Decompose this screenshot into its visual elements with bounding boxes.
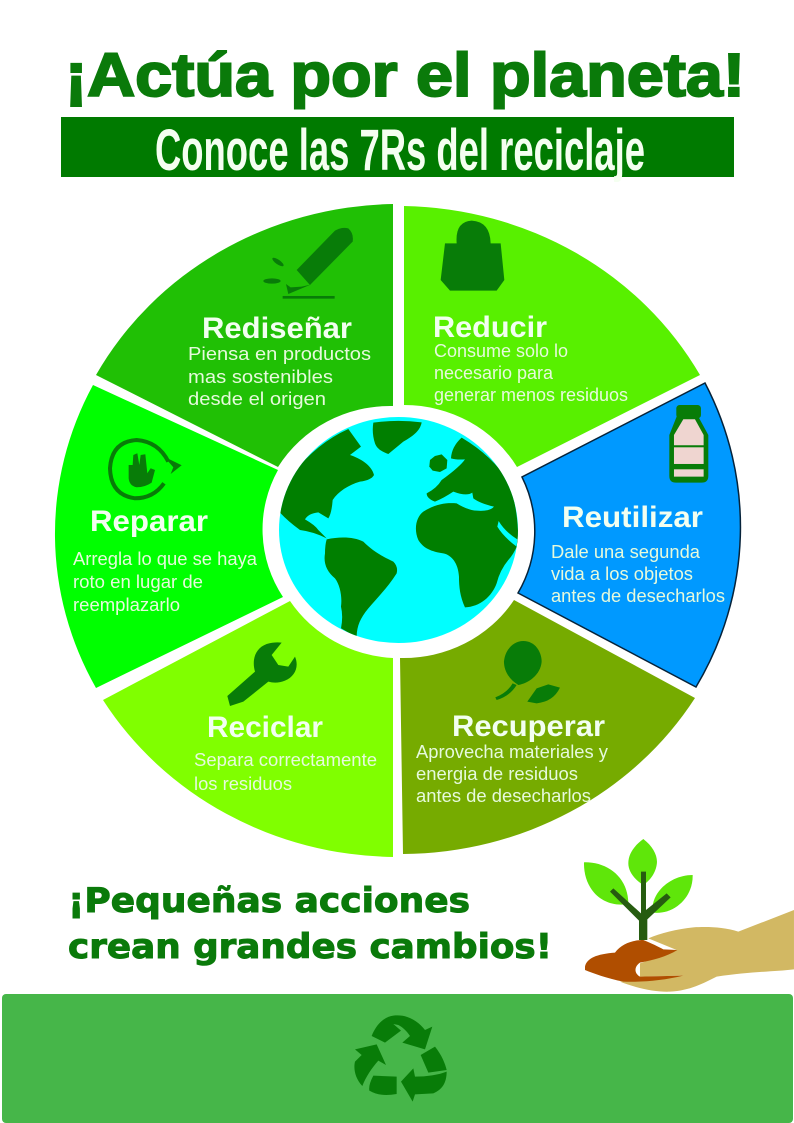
panel: reparar bbox=[55, 385, 283, 688]
description: Aprovecha materiales y bbox=[416, 742, 608, 762]
leaves bbox=[584, 839, 693, 913]
description: vida a los objetos bbox=[551, 564, 693, 584]
panel: recuperar bbox=[400, 600, 695, 854]
description: desde el origen bbox=[188, 389, 326, 409]
description: los residuos bbox=[194, 774, 292, 794]
slogan: ¡Pequeñas acciones bbox=[68, 881, 470, 921]
description: mas sostenibles bbox=[188, 367, 333, 387]
footer band bbox=[2, 994, 793, 1123]
heading: Reutilizar bbox=[562, 501, 703, 534]
description: antes de desecharlos bbox=[416, 786, 591, 806]
description: Arregla lo que se haya bbox=[73, 549, 258, 569]
description: Dale una segunda bbox=[551, 542, 701, 562]
globe bbox=[279, 417, 518, 643]
description bbox=[551, 542, 725, 606]
panel: reducir bbox=[404, 206, 700, 467]
description bbox=[73, 549, 258, 615]
heading: Reparar bbox=[90, 505, 208, 538]
panel: reutilizar bbox=[518, 383, 740, 687]
slogan: crean grandes cambios! bbox=[68, 927, 552, 967]
description bbox=[416, 742, 608, 806]
title: ¡Actúa por el planeta! bbox=[65, 41, 745, 109]
description: Consume solo lo bbox=[434, 341, 568, 361]
icon: pencil bbox=[263, 228, 353, 299]
heading: Reducir bbox=[433, 311, 547, 344]
icon: recycle symbol bbox=[354, 1015, 447, 1102]
icon: hand in repair circle bbox=[110, 440, 182, 498]
description: Separa correctamente bbox=[194, 750, 377, 770]
icon: leaf bbox=[495, 641, 560, 703]
icon: bottle bbox=[669, 405, 708, 483]
stem bbox=[610, 872, 671, 940]
description: necesario para bbox=[434, 363, 554, 383]
description: roto en lugar de bbox=[73, 572, 203, 592]
heading: Rediseñar bbox=[202, 312, 352, 345]
panel: reciclar bbox=[103, 601, 393, 857]
description: Piensa en productos bbox=[188, 344, 371, 364]
heading: Recuperar bbox=[452, 710, 605, 743]
slogan bbox=[68, 881, 552, 967]
icon: hand holding plant bbox=[584, 839, 794, 992]
icon: shopping bag bbox=[441, 221, 504, 291]
description: energia de residuos bbox=[416, 764, 578, 784]
description: generar menos residuos bbox=[434, 385, 628, 405]
icon: wrench bbox=[227, 642, 297, 706]
hand bbox=[620, 910, 794, 992]
soil bbox=[585, 940, 683, 982]
heading: Reciclar bbox=[207, 711, 323, 744]
panel: rediseñar bbox=[96, 204, 393, 467]
description bbox=[194, 750, 377, 794]
description: antes de desecharlos bbox=[551, 586, 725, 606]
description bbox=[434, 341, 628, 405]
description bbox=[188, 344, 371, 409]
description: reemplazarlo bbox=[73, 595, 180, 615]
